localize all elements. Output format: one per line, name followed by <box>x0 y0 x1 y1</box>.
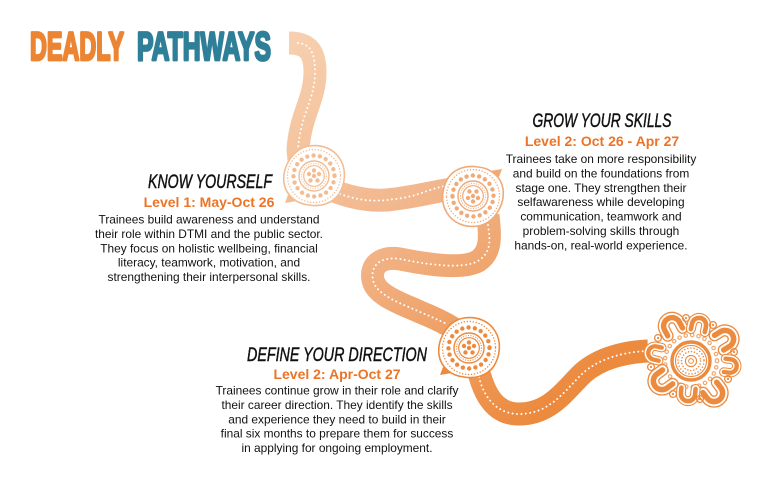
date level: Level 2: Apr-Oct 27 <box>273 366 401 382</box>
heading: GROW YOUR SKILLS <box>532 111 672 132</box>
date level: Level 2: Oct 26 - Apr 27 <box>525 133 679 149</box>
description: final six months to prepare them for success <box>221 427 453 441</box>
description: Trainees take on more responsibility <box>506 152 696 166</box>
description: and build on the foundations from <box>513 166 689 180</box>
icon: third stage circle <box>439 318 499 378</box>
description <box>506 152 696 252</box>
text block: Grow Your Skills <box>506 111 696 252</box>
pathway: winding road <box>289 43 648 414</box>
description: and experience they need to build in their <box>228 412 446 426</box>
title: PATHWAYS <box>137 25 271 69</box>
description: in applying for ongoing employment. <box>241 441 433 455</box>
description: their role within DTMI and the public sector. <box>95 227 323 241</box>
icon: destination sun motif <box>647 315 738 405</box>
description: literacy, teamwork, motivation, and <box>118 256 300 270</box>
description: selfawareness while developing <box>517 195 685 209</box>
title: DEADLY <box>30 25 124 69</box>
icon: first stage circle <box>284 146 344 206</box>
description: communication, teamwork and <box>520 210 682 224</box>
heading: KNOW YOURSELF <box>148 172 273 193</box>
description: strengthening their interpersonal skills. <box>108 270 310 284</box>
text block: Know Yourself <box>95 172 323 284</box>
description: problem-solving skills through <box>523 224 679 238</box>
description: Trainees continue grow in their role and clarify <box>216 384 458 398</box>
description <box>95 212 323 284</box>
title <box>30 25 271 69</box>
date level: Level 1: May-Oct 26 <box>144 194 275 210</box>
description: Trainees build awareness and understand <box>98 212 320 226</box>
heading: DEFINE YOUR DIRECTION <box>247 345 427 366</box>
description: hands-on, real-world experience. <box>514 238 688 252</box>
description <box>216 384 458 455</box>
text block: Define Your Direction <box>216 345 458 455</box>
description: stage one. They strengthen their <box>516 181 687 195</box>
description: their career direction. They identify the skills <box>221 398 453 412</box>
description: They focus on holistic wellbeing, financial <box>100 241 318 255</box>
icon: second stage circle <box>443 166 503 226</box>
